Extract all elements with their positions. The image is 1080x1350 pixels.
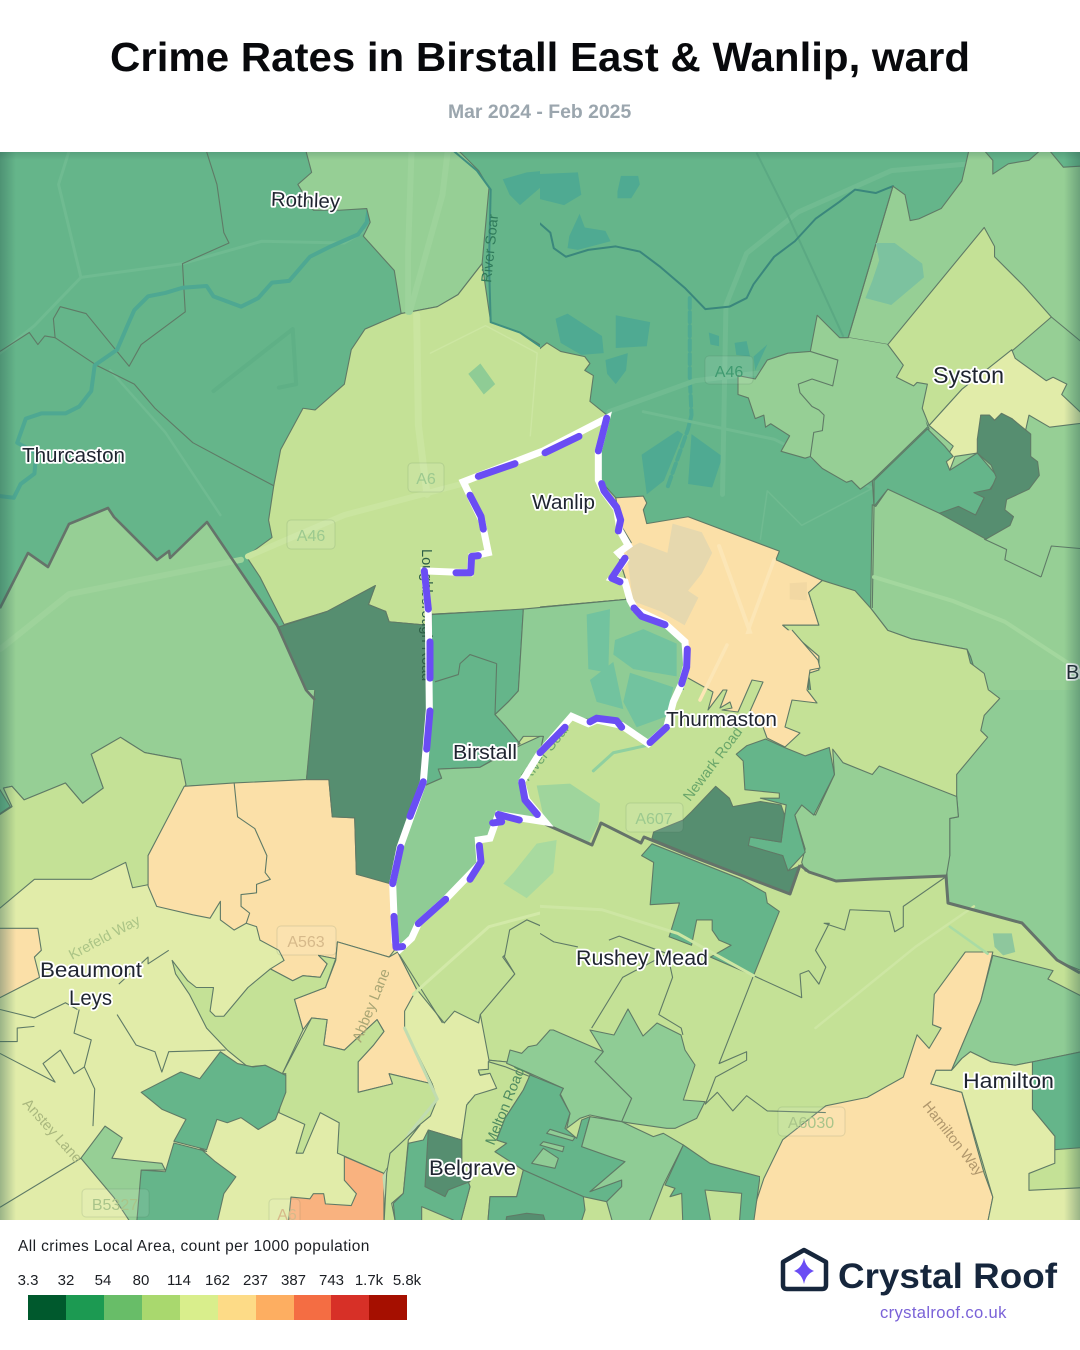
lakes: Watermead north <box>537 172 767 494</box>
area: western light green <box>0 690 314 807</box>
place labels: Leys <box>69 987 112 1010</box>
area: Syston south mid <box>874 429 998 515</box>
area: Birstall lakes <box>540 598 684 690</box>
boundary: Mowmacre inner line <box>234 783 270 923</box>
area: Wanlip east <box>537 343 631 607</box>
area: Rushey Mead light cell north <box>590 1009 705 1128</box>
ward outline: purple dashes <box>393 418 687 947</box>
road and river name labels <box>19 213 987 1180</box>
legend title: All crimes Local Area, count per 1000 population <box>18 1238 370 1255</box>
area: Abbey Lane beige <box>294 942 432 1092</box>
boundaries: pale neighbourhood lines <box>0 913 540 1231</box>
legend tick values: 114 <box>167 1272 191 1289</box>
area: Mowmacre beige <box>148 780 394 981</box>
area: lower mid-green <box>487 1170 585 1237</box>
place labels <box>22 189 1080 1180</box>
road labels: shields: A46 <box>297 528 325 545</box>
legend tick values: 162 <box>205 1272 230 1289</box>
place labels: Rushey Mead <box>576 947 708 970</box>
lake: gravel pits north <box>503 171 540 205</box>
title: Crime Rates in Birstall East & Wanlip, ward <box>110 34 970 80</box>
roads: A6 and A46 <box>233 310 538 564</box>
place labels: Thurcaston <box>22 445 125 467</box>
legend tick values: 32 <box>58 1272 74 1289</box>
area: Thurmaston industrial <box>616 496 822 701</box>
map area: south-west <box>0 687 558 1234</box>
road and river name labels: Anstey Lane <box>19 1096 85 1167</box>
lake: Wanlip field <box>468 363 495 394</box>
legend tick values: 3.3 <box>18 1272 38 1289</box>
road labels: shields: A6 <box>416 471 436 488</box>
legend tick values: 237 <box>243 1272 268 1289</box>
place labels: Thurmaston <box>666 709 777 731</box>
area: street fingers <box>532 1129 575 1168</box>
boundaries and roads: Rothley farmland <box>0 152 366 516</box>
place labels: Beaumont <box>40 959 142 982</box>
area: mid-green cell in Rushey Mead <box>642 844 779 976</box>
map edge vignette <box>0 152 1080 1220</box>
legend tick values: 387 <box>281 1272 306 1289</box>
area: Belgrave west strip <box>383 1125 420 1237</box>
legend tick values: 1.7k <box>355 1272 384 1289</box>
area: top-right cells <box>985 152 1039 175</box>
road and river name labels: Hamilton Way <box>919 1099 987 1180</box>
area: Syston west estate <box>738 315 929 489</box>
legend tick values: 80 <box>133 1272 149 1289</box>
logo: Crystal Roof <box>780 1248 1058 1296</box>
area: river meadow <box>503 840 557 898</box>
area: Watermead light green <box>495 599 687 753</box>
area: Birstall south <box>393 736 545 949</box>
ward sectors: Birstall interior <box>393 599 687 949</box>
lake: east of Soar <box>865 243 924 305</box>
area: Belgrave south light strip <box>422 1207 453 1237</box>
road labels: shields: A563 <box>287 934 325 951</box>
area: Syston north <box>888 227 1051 425</box>
place labels: Wanlip <box>532 492 595 514</box>
area: Hamilton beige <box>747 952 993 1231</box>
area: west fields <box>0 508 312 701</box>
area: Birstall mid-green cell <box>425 609 523 785</box>
area: Beaumont Leys mid-green cells <box>81 1052 286 1231</box>
area: mid-green cell north of Rushey Mead <box>736 739 834 871</box>
area: Rushey Mead light cell west <box>507 1030 632 1128</box>
area: north-east fields and Barkby <box>848 147 1080 701</box>
logo wordmark: Crystal Roof <box>838 1257 1057 1296</box>
place labels: Belgrave <box>429 1157 516 1180</box>
river: Soar upstream <box>455 152 540 346</box>
area: Thurmaston east <box>783 580 991 701</box>
legend colour bar <box>28 1295 407 1320</box>
area: Syston centre pale <box>929 350 1080 470</box>
boundary: estate inner line <box>798 351 838 456</box>
river: Soar main channel <box>537 186 893 309</box>
boundaries: yellow-green neighbourhood lines <box>540 878 988 1113</box>
roads: A46 bypass <box>609 153 970 539</box>
map area: north-west <box>0 147 558 704</box>
place labels: Birstall <box>453 742 517 764</box>
area: central yellow-green cells <box>172 737 540 1174</box>
road and river name labels: River Soar <box>479 213 502 283</box>
map area: south-east <box>537 687 1080 1234</box>
road labels: shields <box>82 356 845 1229</box>
legend tick values <box>18 1272 422 1289</box>
area: Hamilton east light <box>951 955 1080 1070</box>
place labels: Rothley <box>271 189 340 213</box>
ward outline: Birstall East and Wanlip <box>393 418 687 949</box>
area: Belgrave dark cell <box>425 1130 470 1197</box>
river: Soar lower <box>593 745 647 771</box>
area: Birstall north <box>432 612 468 614</box>
road and river name labels: Abbey Lane <box>350 967 394 1044</box>
area: Hamilton pale <box>931 1052 1080 1231</box>
ward border: thick boundary east <box>0 508 1080 973</box>
area: Thurmaston south light <box>795 749 958 881</box>
legend tick values: 5.8k <box>393 1272 422 1289</box>
area: Wanlip <box>246 264 551 625</box>
legend tick values: 54 <box>95 1272 111 1289</box>
subtitle: date range: Mar 2024 - Feb 2025 <box>448 101 631 123</box>
area: dark cell west of Birstall <box>279 585 426 690</box>
road and river name labels: Newark Road <box>680 725 746 804</box>
road and river name labels: Loughborough Road <box>418 549 434 681</box>
road labels: shields: A6030 <box>788 1115 834 1132</box>
area: dark cell on ward border <box>652 786 800 895</box>
area: Hamilton mid-green <box>1032 1048 1080 1150</box>
area: dark strip at map bottom <box>503 1213 550 1237</box>
road and river name labels: Melton Road <box>483 1065 529 1147</box>
area: dark cell west of ward <box>306 687 434 884</box>
lake: Hamilton north <box>993 933 1015 955</box>
place labels: Syston <box>933 362 1004 388</box>
area: Thurmaston beige south edge <box>680 630 820 747</box>
road labels: shields: B5327 <box>92 1197 138 1214</box>
river: Rothley Brook <box>0 210 368 498</box>
road labels: shields: A46 <box>715 364 743 381</box>
boundary: estate outline <box>738 186 927 489</box>
area: Belgrave mid-green <box>393 1130 470 1237</box>
area: light cell east of Melton Road <box>582 1117 683 1237</box>
area: east fields <box>946 687 1080 977</box>
area: Melton Road mid-green <box>495 1075 625 1202</box>
area: orange high-crime cell <box>288 1157 384 1231</box>
area: small beige cell west <box>0 928 41 999</box>
lakes: Watermead <box>587 609 677 727</box>
lake: river park <box>537 784 600 844</box>
icon: house with star <box>783 1250 826 1289</box>
area: Melton Road yellow-green strip <box>457 1062 530 1237</box>
area: Rushey Mead and Belgrave detail <box>383 1009 760 1237</box>
roads and pits: Thurmaston <box>626 524 806 634</box>
choropleth map <box>0 152 1080 1220</box>
road and river name labels: River Soar <box>519 721 573 784</box>
area: Glenfield yellow-green <box>0 737 186 908</box>
legend tick values: 743 <box>319 1272 344 1289</box>
area: mid-green cell south-east <box>665 1145 760 1237</box>
legend <box>18 1272 422 1320</box>
road labels: shields: A607 <box>635 811 673 828</box>
map area: north-east <box>537 147 1080 704</box>
area: Syston dark cell <box>939 413 1039 539</box>
road and river name labels: Krefeld Way <box>66 912 144 964</box>
place labels: Hamilton <box>963 1070 1054 1093</box>
website url: crystalroof.co.uk <box>880 1303 1007 1322</box>
area: Rothley east <box>298 147 489 314</box>
